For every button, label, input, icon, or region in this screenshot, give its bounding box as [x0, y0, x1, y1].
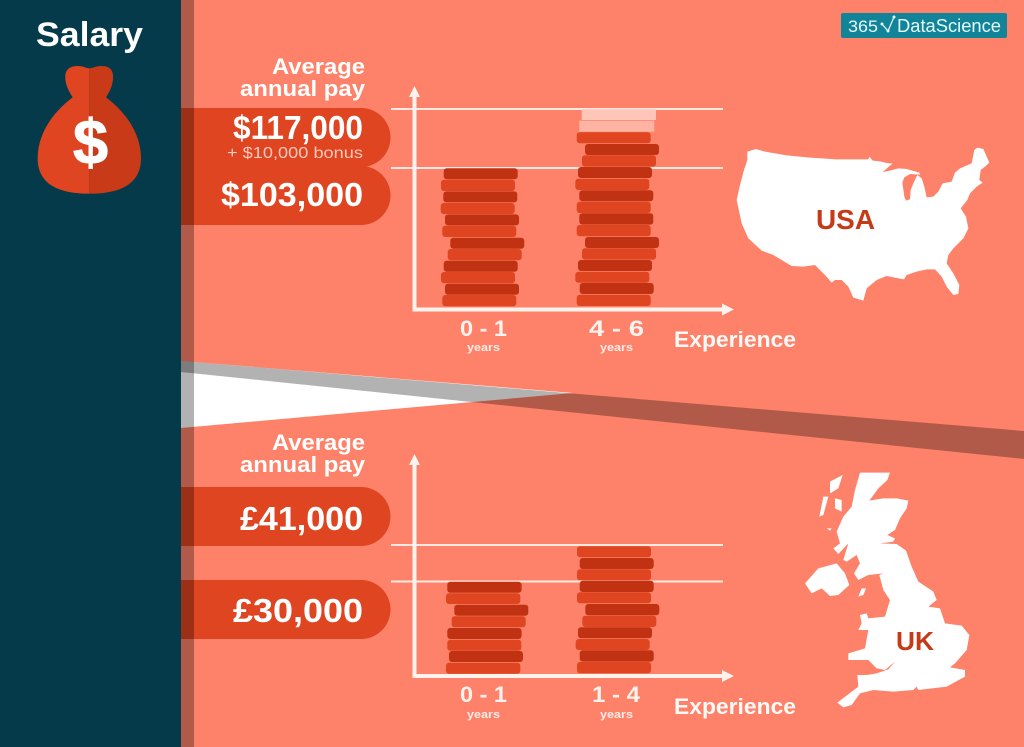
UK axis title: Experience	[674, 694, 796, 719]
UK stack: 0-1 years	[446, 582, 528, 674]
value: £30,000: £30,000	[233, 592, 363, 629]
value: $103,000: $103,000	[221, 176, 363, 213]
USA bar chart	[391, 86, 796, 354]
UK axes	[409, 454, 734, 682]
UK heading: average annual pay	[240, 430, 366, 477]
value: $117,000: $117,000	[233, 109, 363, 146]
UK x label: 1-4 years	[592, 682, 641, 721]
diagonal shadow band	[181, 361, 1024, 459]
map: USA	[737, 148, 989, 301]
USA x label: 0-1 years: 0 - 1	[460, 316, 507, 341]
UK x label: 0-1 years: years	[467, 709, 500, 721]
USA heading: average annual pay: annual pay	[240, 76, 366, 101]
USA x label: 0-1 years: years	[467, 342, 500, 354]
sidebar	[0, 0, 181, 747]
pill: £30,000	[181, 580, 390, 639]
logo: 365	[848, 17, 878, 36]
value: bonus: + $10,000 bonus	[227, 145, 363, 162]
USA stack: 0-1 years	[441, 168, 524, 306]
UK bar chart	[391, 454, 796, 721]
pill: £41,000	[181, 487, 390, 546]
icon: money bag	[38, 66, 141, 194]
USA axis title: Experience	[674, 327, 796, 352]
logo	[841, 13, 1007, 38]
USA x label: 4-6 years: years	[600, 342, 633, 354]
UK x label: 0-1 years: 0 - 1	[460, 682, 507, 707]
USA stack: 4-6 years	[575, 109, 659, 306]
USA heading: average annual pay: Average	[272, 54, 365, 79]
value: £41,000: £41,000	[240, 500, 363, 537]
USA x label: 4-6 years	[589, 316, 644, 354]
UK heading: average annual pay: annual pay	[240, 452, 366, 477]
USA axes	[409, 86, 734, 316]
white wedge divider	[181, 361, 573, 428]
logo: DataScience	[897, 16, 1001, 36]
map: UK: UK	[896, 626, 934, 656]
map: USA: USA	[816, 204, 875, 235]
UK heading: average annual pay: Average	[272, 430, 365, 455]
UK x label: 1-4 years: years	[600, 709, 633, 721]
UK stack: 1-4 years	[576, 546, 659, 673]
icon: money bag: $	[73, 108, 108, 178]
USA heading: average annual pay	[240, 54, 366, 101]
pill: $103,000	[181, 166, 390, 225]
USA x label: 0-1 years	[460, 316, 507, 354]
UK x label: 0-1 years	[460, 682, 507, 721]
vertical shadow strip	[181, 0, 194, 747]
USA x label: 4-6 years: 4 - 6	[589, 316, 644, 341]
pill: $117,000	[181, 108, 390, 167]
title: Salary	[36, 16, 143, 54]
UK x label: 1-4 years: 1 - 4	[592, 682, 641, 707]
map: UK	[805, 473, 969, 707]
